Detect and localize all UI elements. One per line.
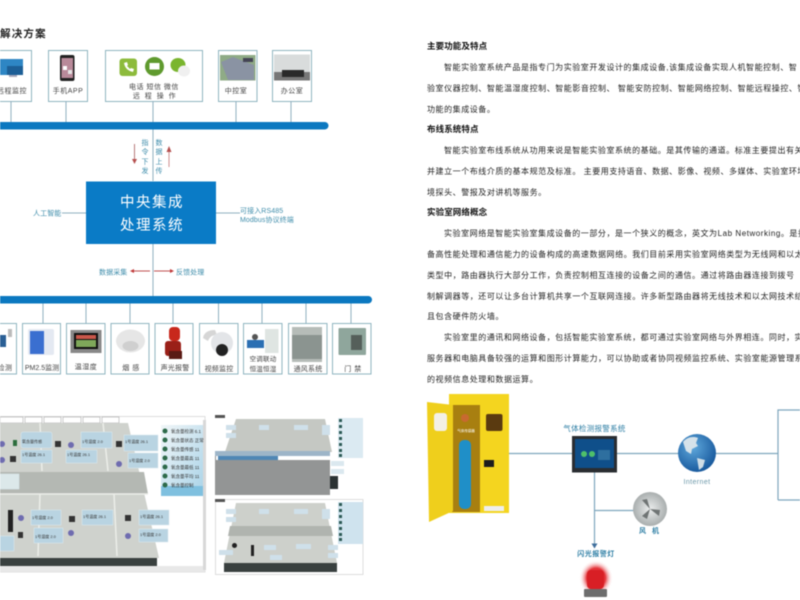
paragraph: main features: 智能实验室系统产品是指专门为实验室开发设计的集成设备,该集成设备实现人机智能控制、智 [444,62,797,72]
terminal: phone, sms, wechat: 电话 短信 微信 [129,82,179,91]
icon: alarm light [577,549,615,597]
label: RS485: Modbus协议终端 [240,215,294,224]
heading: lab network: 实验室网络概念 [427,207,488,217]
label: data up: 传 [155,166,163,175]
screenshot: floor plan main: 1号温度 26.1 [125,438,149,444]
gas detection panel: 气体检测报警系统 [563,423,626,433]
icon: phone [120,58,137,76]
gas system connectors [509,410,800,546]
screenshot: floor plan main: 1号湿度 2.0 [82,438,104,444]
label: data up: 上 [155,157,163,166]
screenshot: overlay window [215,415,363,495]
top terminals row [0,50,312,102]
device: ventilation [288,324,327,374]
label: RS485 [240,206,294,224]
screenshot: floor plan main: 1号湿度 2.0 [140,531,162,537]
terminal: remote monitoring [0,50,32,102]
status legend: 氧含量最高 11 [171,455,200,462]
central processing box [86,182,216,244]
terminal: mobile app [48,50,88,102]
arrow: data up [166,146,172,167]
device: PM2.5: PM2.5监测 [25,363,59,372]
label: command down: 令 [141,147,149,156]
label: data up: 数 [155,138,163,147]
screenshot: floor plan main: 1号温度 26.1 [140,513,164,519]
heading: wiring: 布线系统特点 [427,124,479,134]
terminal: mobile app: 手机APP [53,86,83,95]
device: hvac [244,324,282,374]
connector lines [11,101,351,323]
label: command down: 发 [141,166,149,175]
sensor callouts [0,432,169,551]
bus: lower [0,296,372,304]
label: command down: 下 [141,158,149,166]
screenshot: floor plan main: 1号温度 26.1 [67,451,91,457]
terminal: office: 办公室 [281,86,303,95]
icon: fan: 风 机 [639,526,661,535]
paragraph: main features: 验室仪器控制、智能温湿度控制、智能影音控制、 智能安防控制、智能网络控制、智能远程操控、智 [427,83,800,93]
paragraph: wiring [427,145,800,197]
label: RS485: 可接入RS485 [240,206,283,215]
paragraph: main features [427,62,800,114]
label: feedback: 反馈处理 [176,268,204,276]
arrow: to alarm light [592,544,598,548]
section: wiring [427,124,800,197]
screenshot: floor plan main: 氧含量传感 [22,438,42,444]
label: command down [141,138,149,175]
paragraph: lab network: 备高性能处理和通信能力的设备构成的高速数据网络。我们目前采用实验室网络类型为无线网和以太 [427,249,800,259]
icon: internet globe [678,434,716,486]
icon: alarm light: 闪光报警灯 [577,549,615,558]
screenshot: floor plan main: 1号湿度 2.0 [35,533,57,539]
terminal: phone, sms, wechat: 远 程 操 作 [133,91,177,100]
status legend: 氧含量检测 6.1 [171,428,202,435]
screenshot: floor plan main: 1号湿度 2.0 [32,514,54,520]
device: smoke sensor [111,324,149,374]
arrow: data collection [130,269,150,273]
status legend: 氧含量最低 11 [171,464,200,471]
label: AI: 人工智能 [33,208,61,218]
label: command down: 指 [141,138,149,147]
status legend: 氧含量状态 正常 [171,437,204,444]
paragraph: lab network: 且包含硬件防火墙。 [427,311,504,321]
floor [0,423,159,558]
screenshot: floor plan main: 1号湿度 2.0 [129,457,151,463]
icon: fan [633,492,667,535]
icon: internet globe: Internet [684,479,710,486]
label: data collection: 数据采集 [99,268,127,276]
terminal: office [272,50,312,102]
device: siren: 声光报警 [161,363,189,372]
central processing box: 中央集成 [120,194,184,211]
section: main features [427,41,800,114]
device: hvac: 恒温恒湿 [250,364,277,373]
device: smoke sensor: 烟 感 [122,363,140,372]
device: PM2.5 [22,324,60,374]
icon: wechat [170,58,190,76]
device row [0,324,371,374]
terminal: phone, sms, wechat [106,50,202,102]
paragraph: lab network [427,228,800,321]
paragraph: wiring: 境探头、警报及对讲机等服务。 [427,187,547,197]
paragraph: wiring: 智能实验室布线系统从功用来说是智能实验室系统的基础。是其传输的通道。标准主要提出有关 [444,145,800,155]
device: humidity [66,324,105,374]
paragraph: lab network: 实验室网络是智能实验室集成设备的一部分，是一个狭义的概念，英文为Lab Networking。是指 [444,228,800,238]
device: video camera: 视频监控 [205,364,233,373]
arrow: feedback [154,269,174,273]
paragraph: lab network: 类型中，路由器执行大部分工作，负责控制相互连接的设备之间的通信。通过将路由器连接到拨号 [427,270,795,280]
screenshot: small floor plan [215,499,363,574]
label: data up [155,138,163,175]
paragraph: lab network: 制解调器等，还可以让多台计算机共享一个互联网连接。许多新型路由器将无线技术和以太网技术结 [427,291,800,301]
central processing box: 处理系统 [120,217,184,234]
status legend: 氧含量平均 11 [171,473,200,480]
heading: main features: 主要功能及特点 [427,41,488,51]
paragraph: communication devices: 实验室里的通讯和网络设备，包括智能实验室系统，都可通过实验室网络与外界相连。同时，实 [444,332,800,342]
device: door access: 门 禁 [344,364,362,373]
paragraph: communication devices: 的视频信息处理和数据运算。 [427,374,538,384]
label: data up: 据 [155,147,163,156]
tabs [0,417,119,423]
device: video camera [200,324,238,374]
icon: sms [145,57,164,76]
icon: gas cabinet: 气体传感器 [457,428,475,433]
icon: gas cabinet [427,394,509,522]
gas detection panel [563,423,626,472]
paragraph: main features: 功能的集成设备。 [427,104,495,114]
status legend: 氧含量传感 11 [171,446,200,453]
device: humidity: 温湿度 [75,362,97,371]
screenshot: floor plan main: 1号温度 26.1 [22,451,46,457]
paragraph: communication devices [427,332,800,384]
section: lab network [427,207,800,384]
device: ventilation: 通风系统 [294,364,322,373]
status legend: 氧含量控制 [171,482,194,489]
bus: upper [0,122,328,130]
arrow: command down [132,144,137,164]
status legend [161,425,204,496]
screenshot: floor plan main: 1号温度 26.1 [83,513,107,519]
terminal: control room [218,50,257,102]
device: siren [155,324,193,374]
paragraph: communication devices: 服务器和电脑具备较强的运算和图形计算能力，可以协助或者协同视频监控系统、实验室能源管理系 [427,353,800,363]
device: gas detection [0,324,16,374]
terminal: control room: 中控室 [225,86,247,95]
device: hvac: 空调联动 [250,354,277,363]
title: 解决方案 [0,27,47,40]
screenshot: floor plan main [0,416,206,572]
device: door access [332,324,371,374]
